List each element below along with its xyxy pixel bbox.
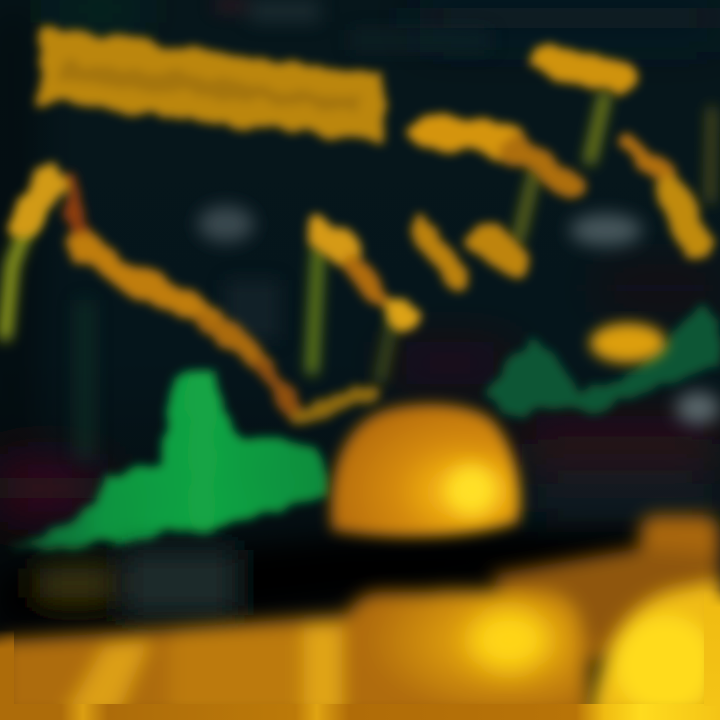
- gold bars row: foreground: [0, 515, 720, 720]
- chart line: upper right gold zigzag: [430, 60, 695, 245]
- green thin line segments: [5, 95, 712, 380]
- gold price tag: [590, 323, 666, 363]
- gold bar highlight: [472, 610, 548, 670]
- chart line: middle gold zigzag: [322, 230, 515, 318]
- gold dome bar: [331, 404, 520, 537]
- title banner: [40, 26, 386, 142]
- shadow band under chart: [0, 528, 720, 624]
- faint grid columns: [76, 0, 490, 460]
- bright gold bar: bottom right: [590, 580, 720, 720]
- green area chart: left: [15, 368, 330, 550]
- grey data labels: [198, 206, 720, 424]
- gold bars: canvas edge fill: [0, 590, 720, 720]
- chart line: left descending gold zigzag: [22, 175, 370, 415]
- green area chart: right: [488, 305, 720, 412]
- dome highlight: [448, 466, 496, 514]
